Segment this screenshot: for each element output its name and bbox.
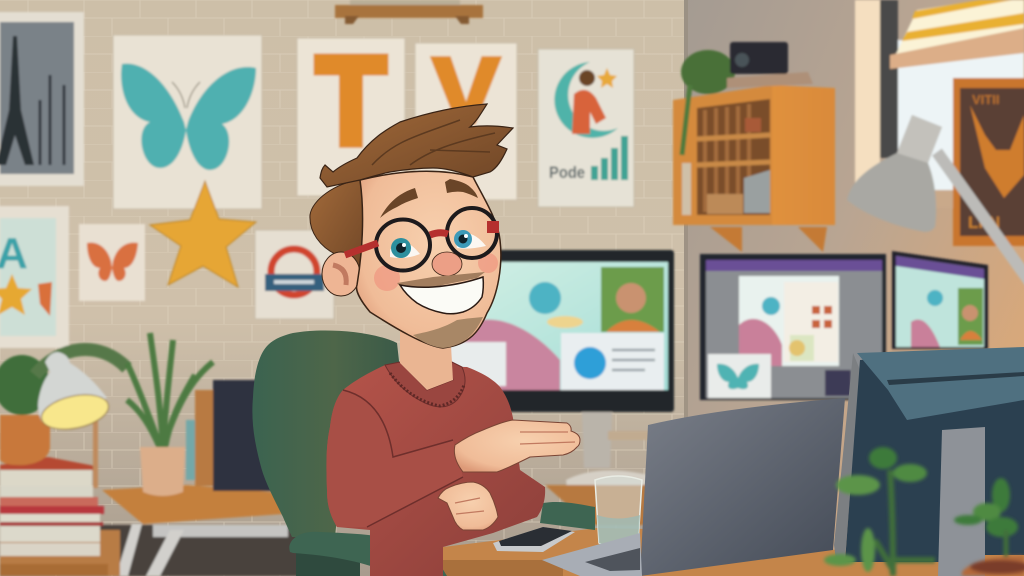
- glasses and eyes: [345, 208, 499, 270]
- hair back and side: [310, 180, 366, 277]
- wall shelf top: [335, 0, 483, 24]
- small table lamp: [38, 352, 112, 488]
- poster: orange butterfly: [79, 224, 145, 301]
- foreground plant right: [954, 478, 1024, 576]
- monitor right one: [700, 254, 886, 400]
- laptop: [542, 398, 845, 576]
- monitor centre: [440, 250, 674, 412]
- neck: [400, 325, 453, 390]
- window with blinds: [855, 0, 1024, 208]
- floor under left desk: [100, 525, 300, 576]
- monitor right two: [892, 251, 988, 349]
- poster: Eiffel tower: [0, 12, 84, 186]
- hair top: [320, 104, 513, 187]
- potted plant left: [0, 350, 127, 465]
- hands: [438, 420, 580, 530]
- wall star: [150, 181, 256, 287]
- smile: [400, 277, 483, 314]
- framed phoenix art: VITII: [972, 92, 999, 107]
- framed phoenix art: LIIN: [968, 213, 1000, 232]
- stack of books: [0, 457, 104, 542]
- potted plant centre left: [127, 333, 213, 496]
- back desk surface: [545, 485, 660, 525]
- face: [357, 171, 501, 348]
- monitor stand: [566, 412, 662, 494]
- desk left and items: [0, 485, 283, 576]
- poster: letter T: [297, 32, 405, 196]
- desk centre: [443, 528, 1024, 576]
- poster: letter T: T: [316, 32, 386, 171]
- PC tower: [186, 380, 273, 491]
- poster: letter V: [415, 40, 517, 200]
- eyebrows: [380, 179, 478, 218]
- glass of water: [595, 476, 642, 548]
- poster: letter V: V: [433, 40, 499, 142]
- chair: [252, 330, 595, 576]
- plant and box on cabinet: [681, 42, 813, 155]
- smartphone: [493, 527, 575, 552]
- poster: teal butterfly: [113, 35, 262, 209]
- wood cabinet shelf: [673, 85, 835, 252]
- nose and mustache: [397, 252, 485, 287]
- poster: roundel sign: [255, 230, 334, 319]
- foreground plant centre: [824, 447, 935, 576]
- poster: podcast with chart: Pode: [549, 163, 585, 182]
- poster: podcast with chart: [538, 49, 634, 207]
- poster: letter A: [0, 206, 69, 348]
- ear: [322, 252, 360, 296]
- desk lamp right: [847, 115, 1024, 285]
- man torso in sweater: [326, 360, 545, 576]
- framed phoenix art: [953, 78, 1024, 246]
- foreground monitor: [834, 347, 1024, 576]
